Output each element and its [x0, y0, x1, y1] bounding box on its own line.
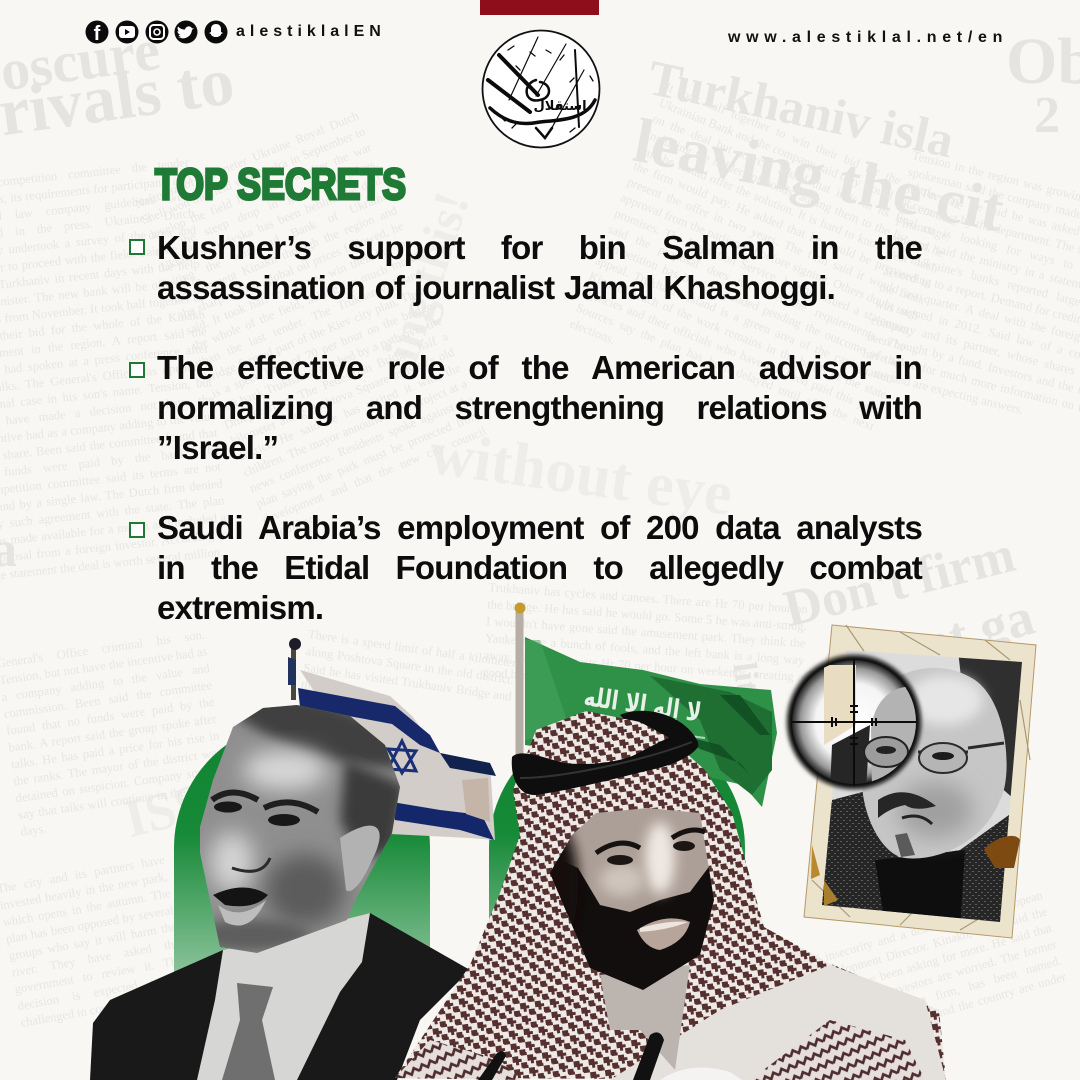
- bullet 3: in the Etidal Foundation to allegedly combat: [157, 549, 922, 586]
- portrait: bin Salman: [395, 711, 946, 1080]
- suit: [90, 913, 470, 1080]
- background: newspaper collage: Turkhaniv isla: [643, 49, 959, 168]
- bullet 2: The effective role of the American advisor in: [157, 349, 922, 386]
- background: newspaper collage: Trukhaniv has cycles and canoes. There are Hr 70 per hour on the bridge. He has said he would go. Some 5 he was anti-smug. I wouldn't have gone said the amusement park. They think the Yankees are a bunch of fools, and the left bank is a long way away. The canoe costs Hr 70 per hour on weekends, creating a good business for the owners.: [482, 580, 808, 689]
- Saudi flag: [514, 602, 777, 807]
- background: newspaper collage: of giant ga: [790, 586, 1040, 711]
- green arch right: [489, 720, 745, 975]
- illustration: leaders, flags and photo: [90, 602, 1036, 1080]
- bullet 2: normalizing and strengthening relations with: [157, 389, 922, 426]
- bullet 2: [129, 349, 922, 466]
- bullet 3: [129, 509, 922, 626]
- social handle: alestiklalEN: [236, 23, 386, 40]
- background: newspaper collage: ISS: [118, 771, 211, 849]
- background: newspaper collage: ing this!: [373, 185, 480, 368]
- necktie: [222, 983, 275, 1080]
- background: newspaper collage: There is a speed limit of half a kilometer along Poshtova Square in the old district. Said he has visited Trukhaniv Bridge and the left bank.: [300, 627, 517, 704]
- photo frame: Khashoggi: [804, 625, 1036, 938]
- Saudi flag: لا إله إلا الله: [582, 682, 703, 728]
- face features: [212, 792, 258, 800]
- agal back ring: [620, 711, 698, 752]
- face: [550, 808, 714, 990]
- background: newspaper collage: It took half together to win their bid for the whole. The Ukrainian Bank and the company said they would not comment on the deal but sources added that it is in its final stage. Including the holders of bonds, adding them to the list and he said he would offer the solution. It is hard to know how much the firm would pay. He added that he would be prepared to present the offer in two years. The firm said it would seek approval from the parliament before signing. Others doubt such promises. The Inspection Service, having issued a statement, said the proposal does not meet the requirements. The competition has been suspended pending the outcome of the appeal. Trukhaniv Island is a green area of the capital, said Kinakh. Much of the work remains in the hands of the state agencies and their officials who have not been paid this year. Sources say the plan has been delayed until after the next elections.: [568, 80, 965, 433]
- portrait: Netanyahu: [90, 672, 470, 1080]
- microphones: [633, 1032, 664, 1080]
- Israeli flag: [288, 638, 496, 840]
- logo: calligraphy seal: استقلال: [533, 99, 587, 114]
- background: newspaper collage: leaving the cit: [628, 105, 1009, 245]
- neck: [600, 965, 690, 1070]
- background: newspaper collage: Naftogaz of the meter Ukraine Royal Dutch Shell won the field with Nadra in September to develop the field but withdrew after the war and the steep drop in global oil prices. Ukraine's Yuzivska has been behind the deal, citing the war and Bank of Ukraine. Development Kinakh through the region and the sharp drop in global oil prices followed, he said. It took half together to win their bid for the whole of the field, asking for much more than the last tender. The Trukhaniv Island bridge formed part of the Kiev city plan. There is a speed limit of 70 per hour on the bridge. Left bank Trukhaniv, reached by a path over the Dnieper river. The Pedestrian Bridge, half a kilometer along Poshtova Square in Kiev's old district. He said he has visited it with the children. The mayor announced the project at a news conference. Residents spoke against the plan saying the park must be protected from development and that the new city council should act.: [133, 109, 488, 542]
- background: newspaper collage: General's Office criminal his son. Tension, but not have the incentive had as a company adding to the value and commission. Been said the committee found that no funds were paid by the bank. A report said the group spoke after talks. He has paid a price for his rise in the ranks. The mayor of the district was detained on suspicion. Company sources say that talks will continue in the coming days.: [0, 627, 227, 839]
- background: newspaper collage: 2: [1034, 87, 1060, 144]
- background: newspaper collage: Don't firm: [778, 526, 1020, 638]
- background: newspaper collage: without eye: [425, 419, 737, 529]
- social icons row: f: [94, 23, 101, 45]
- head: [200, 705, 400, 953]
- shirt collar: [197, 913, 370, 1080]
- background: newspaper collage: litre: [725, 660, 770, 724]
- keffiyeh and shawl: [395, 711, 946, 1080]
- bullet 1: Kushner’s support for bin Salman in the: [157, 229, 922, 266]
- bullet 1: assassination of journalist Jamal Khashoggi.: [157, 269, 835, 306]
- website address: www.alestiklal.net/en: [728, 29, 1008, 46]
- rifle scope: [787, 655, 930, 790]
- bullet 3: Saudi Arabia’s employment of 200 data analysts: [157, 509, 922, 546]
- background: newspaper collage: The city and its partners have invested heavily in the new park, which opens in the autumn. The plan has been opposed by several groups who say it will harm the river. They have asked the government to review it. The decision is expected to be challenged in court.: [0, 853, 186, 1030]
- title: TOP SECRETS: [155, 160, 406, 209]
- bullet 2: ”Israel.”: [157, 429, 278, 466]
- bullet 3: extremism.: [157, 589, 323, 626]
- bullet 1: [129, 229, 922, 306]
- green arch left: [174, 720, 430, 975]
- background: newspaper collage: rivals to: [0, 42, 238, 150]
- top red bar: [480, 0, 599, 15]
- agal headband: [512, 735, 698, 795]
- background: newspaper collage: oscure: [0, 17, 164, 103]
